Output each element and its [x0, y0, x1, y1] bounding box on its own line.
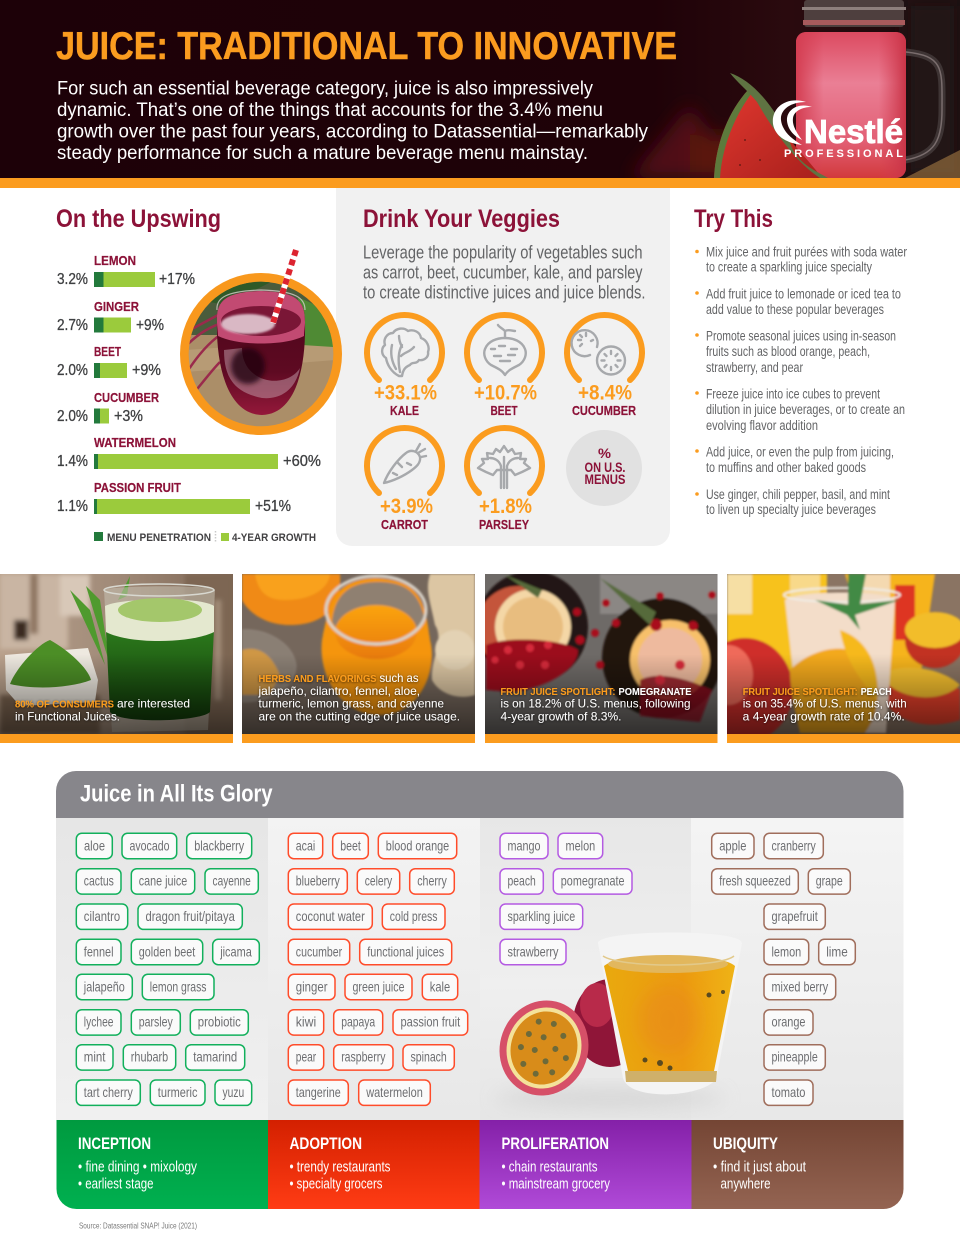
inception ingredient pills: turmeric	[158, 1084, 198, 1100]
tile caption: jalapeño, cilantro, fennel, aloe,	[258, 684, 420, 698]
intro text: steady performance for such a mature beverage menu mainstay.	[57, 143, 588, 164]
tile caption: FRUIT JUICE SPOTLIGHT:	[500, 686, 616, 698]
bar row: passion fruit	[57, 480, 291, 515]
bar row: watermelon	[57, 435, 321, 470]
veggie stat: kale: KALE	[390, 403, 419, 418]
bar row: cucumber: +3%	[114, 408, 143, 425]
tile caption: FRUIT JUICE SPOTLIGHT:	[743, 686, 858, 698]
tip: seasonal juices	[695, 328, 896, 375]
tip: ice cubes: dilution in juice beverages, or to create an	[706, 402, 905, 417]
stage: ubiquity: anywhere	[720, 1176, 770, 1192]
bar row: passion fruit: +51%	[255, 498, 291, 515]
bar row: lemon	[57, 253, 195, 288]
intro text	[57, 78, 648, 164]
veggie stat: beet: BEET	[490, 403, 518, 418]
logo: Nestlé Professional: Nestlé	[804, 113, 903, 150]
inception ingredient pills: fennel	[84, 943, 114, 959]
stage: adoption	[268, 1120, 480, 1209]
intro text: For such an essential beverage category, juice is also impressively	[57, 78, 593, 100]
tile orange bar	[485, 734, 718, 743]
adoption ingredient pills: papaya	[341, 1014, 375, 1030]
tip: sparkling juice: to create a sparkling juice specialty	[706, 260, 872, 274]
adoption ingredient pills: ginger	[296, 978, 328, 994]
stage: proliferation: • mainstream grocery	[502, 1176, 610, 1192]
veggie stat: cucumber	[567, 315, 642, 418]
ubiquity ingredient pills: lime	[826, 943, 848, 959]
ubiquity ingredient pills: fresh squeezed	[719, 873, 791, 889]
logo: Nestlé Professional	[773, 100, 903, 160]
bar row: lemon: 3.2%	[57, 271, 88, 288]
veggie stat: cucumber: CUCUMBER	[572, 403, 637, 418]
ubiquity ingredient pills: pineapple	[772, 1049, 818, 1065]
ubiquity ingredient pills: lemon	[772, 943, 801, 959]
veggie stat: carrot: +3.9%	[380, 495, 433, 518]
adoption ingredient pills: cucumber	[296, 943, 342, 959]
panel: Juice in All Its Glory	[56, 771, 904, 1209]
adoption ingredient pills: cold press	[390, 908, 438, 924]
ubiquity ingredient pills	[712, 833, 855, 1105]
veggie stat: parsley: +1.8%	[479, 495, 532, 518]
tip: ice cubes: evolving flavor addition	[706, 418, 818, 433]
ubiquity ingredient pills: grape	[816, 873, 843, 889]
inception ingredient pills: tart cherry	[84, 1084, 133, 1100]
stage: proliferation	[480, 1120, 692, 1209]
proliferation ingredient pills: melon	[566, 837, 595, 853]
bar row: beet: 2.0%	[57, 362, 88, 379]
adoption ingredient pills: watermelon	[365, 1084, 423, 1100]
photo tile: herbs and flavorings	[242, 574, 475, 743]
inception ingredient pills: jalapeño	[83, 978, 125, 994]
title: JUICE: TRADITIONAL TO INNOVATIVE	[56, 25, 677, 68]
adoption ingredient pills: blood orange	[386, 837, 449, 853]
tip: ice cubes: Freeze juice into ice cubes to prevent	[706, 386, 880, 402]
adoption ingredient pills: celery	[365, 873, 392, 889]
bar row: beet: +9%	[132, 362, 161, 379]
bar row: passion fruit: 1.1%	[57, 498, 88, 515]
panel header: Juice in All Its Glory	[80, 780, 273, 808]
intro text: growth over the past four years, according to Datassential—remarkably	[57, 122, 648, 142]
bar row: ginger: GINGER	[94, 299, 140, 314]
adoption ingredient pills: beet	[340, 837, 361, 853]
tip: lemonade or iced tea: Add fruit juice to lemonade or iced tea to	[706, 286, 901, 302]
inception ingredient pills: golden beet	[139, 943, 195, 959]
icon: cucumber	[572, 330, 625, 374]
ubiquity ingredient pills: apple	[719, 837, 747, 853]
inception ingredient pills: aloe	[84, 837, 105, 853]
photo: passion fruit juice glass	[486, 932, 742, 1108]
inception ingredient pills: cane juice	[139, 873, 187, 889]
veggie stat: carrot	[367, 428, 442, 532]
bar row: watermelon: +60%	[283, 453, 321, 470]
veggies intro text: as carrot, beet, cucumber, kale, and parsley	[363, 262, 642, 282]
tip: lemonade or iced tea	[695, 286, 901, 317]
photo tile: pomegranate spotlight	[476, 571, 722, 743]
bar row: passion fruit: PASSION FRUIT	[94, 480, 181, 495]
inception ingredient pills: blackberry	[194, 837, 244, 853]
inception ingredient pills: cactus	[84, 873, 114, 889]
stage: ubiquity	[692, 1120, 904, 1209]
tip: baked goods	[695, 444, 894, 475]
tip: sparkling juice: Mix juice and fruit purées with soda water	[706, 244, 907, 260]
inception ingredient pills	[76, 833, 259, 1105]
tile caption: POMEGRANATE	[618, 686, 692, 698]
heading: On the Upswing: On the Upswing	[56, 205, 221, 233]
tip: seasonal juices: Promote seasonal juices using in-season	[706, 328, 896, 344]
bar row: beet: BEET	[94, 344, 121, 359]
bar row: beet	[57, 344, 161, 379]
ubiquity ingredient pills: orange	[772, 1014, 806, 1030]
header photo: watermelon juice jar	[630, 0, 960, 178]
inception ingredient pills: cilantro	[84, 908, 120, 924]
bar row: watermelon: WATERMELON	[94, 435, 176, 450]
tip: seasonal juices: fruits such as blood orange, peach,	[706, 344, 870, 359]
proliferation ingredient pills: mango	[508, 837, 541, 853]
bar row: ginger: 2.7%	[57, 317, 88, 334]
adoption ingredient pills: pear	[296, 1049, 316, 1065]
veggie stat: kale: +33.1%	[374, 382, 437, 404]
veggies intro text: Leverage the popularity of vegetables such	[363, 242, 642, 262]
tile caption: is on 18.2% of U.S. menus, following	[500, 696, 690, 710]
bar row: cucumber: 2.0%	[57, 408, 88, 425]
tip: baked goods: Add juice, or even the pulp from juicing,	[706, 444, 894, 460]
bar row: lemon: +17%	[159, 271, 195, 288]
tile orange bar	[242, 734, 475, 743]
stage: proliferation: • chain restaurants	[502, 1158, 598, 1176]
inception ingredient pills: probiotic	[198, 1014, 241, 1030]
ubiquity ingredient pills: mixed berry	[772, 978, 828, 994]
badge: % on U.S. menus	[566, 430, 642, 506]
tile caption	[15, 696, 190, 724]
adoption ingredient pills: passion fruit	[400, 1014, 460, 1030]
stage: inception: • fine dining • mixology	[78, 1158, 197, 1176]
tile caption: 80% OF CONSUMERS	[15, 698, 114, 710]
icon: carrot	[384, 444, 426, 483]
adoption ingredient pills: cherry	[417, 873, 447, 889]
photo tile: functional juices	[0, 574, 233, 743]
stage: ubiquity: UBIQUITY	[713, 1134, 779, 1153]
inception ingredient pills: cayenne	[212, 873, 251, 889]
veggies intro text: to create distinctive juices and juice blends.	[363, 282, 646, 302]
tile caption	[743, 686, 907, 724]
icon: parsley	[478, 446, 530, 488]
veggie stat: beet	[467, 315, 542, 418]
tip: specialty beverages: Use ginger, chili pepper, basil, and mint	[706, 487, 890, 502]
inception ingredient pills: lemon grass	[150, 978, 206, 994]
badge: % on U.S. menus: %	[598, 446, 611, 461]
badge: % on U.S. menus: ON U.S.	[584, 460, 626, 475]
source note: Source: Datassential SNAP! Juice (2021)	[79, 1220, 197, 1230]
tip: specialty beverages: to liven up specialty juice beverages	[706, 502, 876, 517]
proliferation ingredient pills	[500, 833, 632, 965]
chart legend: 4-YEAR GROWTH	[232, 532, 316, 544]
tile caption: PEACH	[861, 686, 892, 698]
veggie stat: kale	[367, 315, 442, 418]
orange header bar	[0, 178, 960, 188]
tile caption	[500, 686, 692, 724]
tile caption: are interested	[117, 696, 190, 710]
badge: % on U.S. menus: MENUS	[584, 472, 626, 487]
adoption ingredient pills: functional juices	[367, 943, 444, 959]
tile caption: a 4-year growth rate of 10.4%.	[743, 710, 905, 724]
tip: lemonade or iced tea: add value to these popular beverages	[706, 302, 884, 317]
adoption ingredient pills: kale	[430, 978, 450, 994]
tile caption: 4-year growth of 8.3%.	[500, 710, 622, 724]
adoption ingredient pills: green juice	[352, 978, 405, 994]
icon: beet	[484, 325, 526, 375]
stage: ubiquity: • find it just about	[713, 1158, 807, 1176]
inception ingredient pills: jicama	[219, 943, 252, 959]
panel: Try This	[694, 205, 907, 517]
panel: On the Upswing	[56, 205, 342, 544]
tile caption: such as	[380, 671, 418, 685]
bar row: ginger	[57, 299, 164, 334]
adoption ingredient pills: blueberry	[296, 873, 340, 889]
stage: adoption: • trendy restaurants	[290, 1158, 390, 1176]
stage: inception: INCEPTION	[78, 1134, 151, 1153]
tile orange bar	[727, 734, 960, 743]
adoption ingredient pills: spinach	[410, 1049, 447, 1065]
tip: specialty beverages	[695, 487, 890, 517]
inception ingredient pills: avocado	[130, 837, 170, 853]
adoption ingredient pills: acai	[296, 837, 315, 853]
tile caption	[258, 671, 460, 724]
adoption ingredient pills: kiwi	[296, 1014, 316, 1030]
veggies intro text	[363, 242, 646, 302]
ubiquity ingredient pills: tomato	[772, 1084, 806, 1100]
heading: Drink Your Veggies: Drink Your Veggies	[363, 205, 560, 233]
veggie stat: cucumber: +8.4%	[578, 382, 632, 404]
inception ingredient pills: parsley	[139, 1014, 173, 1030]
intro text: dynamic. That’s one of the things that accounts for the 3.4% menu	[57, 100, 603, 121]
panel header	[56, 771, 904, 818]
header banner	[0, 0, 960, 178]
adoption ingredient pills: raspberry	[341, 1049, 386, 1065]
bar row: watermelon: 1.4%	[57, 453, 88, 470]
stage: adoption: • specialty grocers	[290, 1176, 382, 1192]
adoption ingredient pills	[288, 833, 468, 1105]
photo tile: peach spotlight	[727, 574, 960, 743]
inception ingredient pills: yuzu	[222, 1084, 244, 1100]
inception ingredient pills: lychee	[84, 1014, 114, 1030]
tip: ice cubes	[695, 386, 905, 433]
ubiquity ingredient pills: cranberry	[772, 837, 816, 853]
photo: beet juice in orange ring	[180, 250, 342, 435]
tile caption: is on 35.4% of U.S. menus, with	[743, 696, 907, 710]
proliferation ingredient pills: peach	[508, 873, 536, 889]
tip: baked goods: to muffins and other baked goods	[706, 460, 866, 475]
bar row: lemon: LEMON	[94, 253, 136, 268]
inception ingredient pills: tamarind	[193, 1049, 237, 1065]
column backgrounds	[56, 818, 904, 1120]
tip: sparkling juice	[695, 244, 907, 274]
icon: kale	[382, 329, 429, 376]
inception ingredient pills: mint	[84, 1049, 106, 1065]
tile orange bar	[0, 734, 233, 743]
tip: seasonal juices: strawberry, and pear	[706, 360, 803, 375]
veggie stat: beet: +10.7%	[474, 382, 537, 404]
stage: inception: • earliest stage	[78, 1176, 154, 1192]
stage: inception	[56, 1120, 268, 1209]
chart legend: MENU PENETRATION	[107, 532, 211, 544]
proliferation ingredient pills: pomegranate	[561, 873, 625, 889]
logo: Nestlé Professional: PROFESSIONAL	[784, 148, 903, 160]
tile caption: in Functional Juices.	[15, 710, 120, 724]
tile caption: HERBS AND FLAVORINGS	[258, 673, 376, 685]
inception ingredient pills: rhubarb	[131, 1049, 168, 1065]
heading: Try This: Try This	[694, 205, 773, 233]
proliferation ingredient pills: sparkling juice	[508, 908, 575, 924]
tile caption: turmeric, lemon grass, and cayenne	[258, 696, 444, 710]
stage: adoption: ADOPTION	[290, 1134, 362, 1153]
adoption ingredient pills: coconut water	[296, 908, 365, 924]
proliferation ingredient pills: strawberry	[508, 943, 558, 959]
inception ingredient pills: dragon fruit/pitaya	[146, 908, 235, 924]
veggie stat: carrot: CARROT	[381, 517, 428, 532]
bar row: ginger: +9%	[136, 317, 164, 334]
chart legend	[94, 531, 316, 544]
bar row: cucumber	[57, 390, 160, 425]
bar row: cucumber: CUCUMBER	[94, 390, 160, 405]
tile caption: are on the cutting edge of juice usage.	[258, 710, 460, 724]
veggie stat: parsley	[467, 428, 542, 532]
panel: Drink Your Veggies	[336, 188, 670, 546]
stage: proliferation: PROLIFERATION	[502, 1134, 609, 1153]
veggie stat: parsley: PARSLEY	[479, 517, 529, 532]
adoption ingredient pills: tangerine	[296, 1084, 341, 1100]
ubiquity ingredient pills: grapefruit	[772, 908, 818, 924]
